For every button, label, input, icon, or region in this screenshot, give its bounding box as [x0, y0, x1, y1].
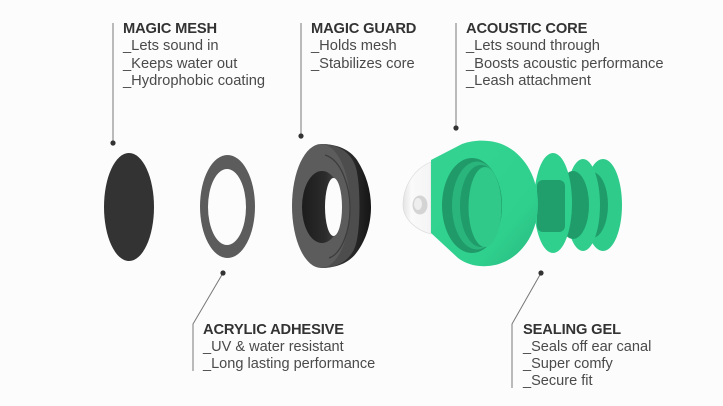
label: acrylic adhesive: _UV & water resistant	[203, 339, 344, 355]
label: magic guard: MAGIC GUARD	[311, 21, 416, 37]
label: magic guard: _Stabilizes core	[311, 56, 415, 72]
label: acoustic core: ACOUSTIC CORE	[466, 21, 587, 37]
label: acoustic core: _Leash attachment	[466, 73, 591, 89]
leader: acoustic core	[453, 23, 459, 131]
sealing gel	[534, 153, 622, 253]
label: magic mesh: _Keeps water out	[123, 56, 237, 72]
label: magic mesh: _Hydrophobic coating	[123, 73, 265, 89]
label: magic guard: _Holds mesh	[311, 38, 397, 54]
label: magic mesh	[122, 21, 265, 89]
leader: magic guard	[298, 23, 304, 139]
label: sealing gel: _Secure fit	[523, 373, 593, 389]
label: acrylic adhesive	[202, 322, 375, 372]
label: sealing gel: SEALING GEL	[523, 322, 621, 338]
acoustic core	[403, 141, 538, 266]
label: sealing gel: _Super comfy	[523, 356, 613, 372]
label: sealing gel: _Seals off ear canal	[523, 339, 651, 355]
label: acrylic adhesive: _Long lasting performance	[203, 356, 375, 372]
label: magic mesh: _Lets sound in	[123, 38, 219, 54]
label: magic guard	[310, 21, 416, 72]
magic mesh disc	[104, 153, 154, 261]
leader: acrylic adhesive	[193, 270, 226, 371]
label: acoustic core	[466, 21, 664, 89]
label: magic mesh: MAGIC MESH	[123, 21, 217, 37]
label: acrylic adhesive: ACRYLIC ADHESIVE	[203, 322, 344, 338]
magic guard	[292, 144, 371, 268]
leader: magic mesh	[110, 23, 116, 146]
label: acoustic core: _Lets sound through	[466, 38, 600, 54]
acrylic adhesive ring	[200, 155, 255, 258]
leader: sealing gel	[512, 270, 544, 388]
label: sealing gel	[522, 322, 651, 389]
label: acoustic core: _Boosts acoustic performance	[466, 56, 664, 72]
